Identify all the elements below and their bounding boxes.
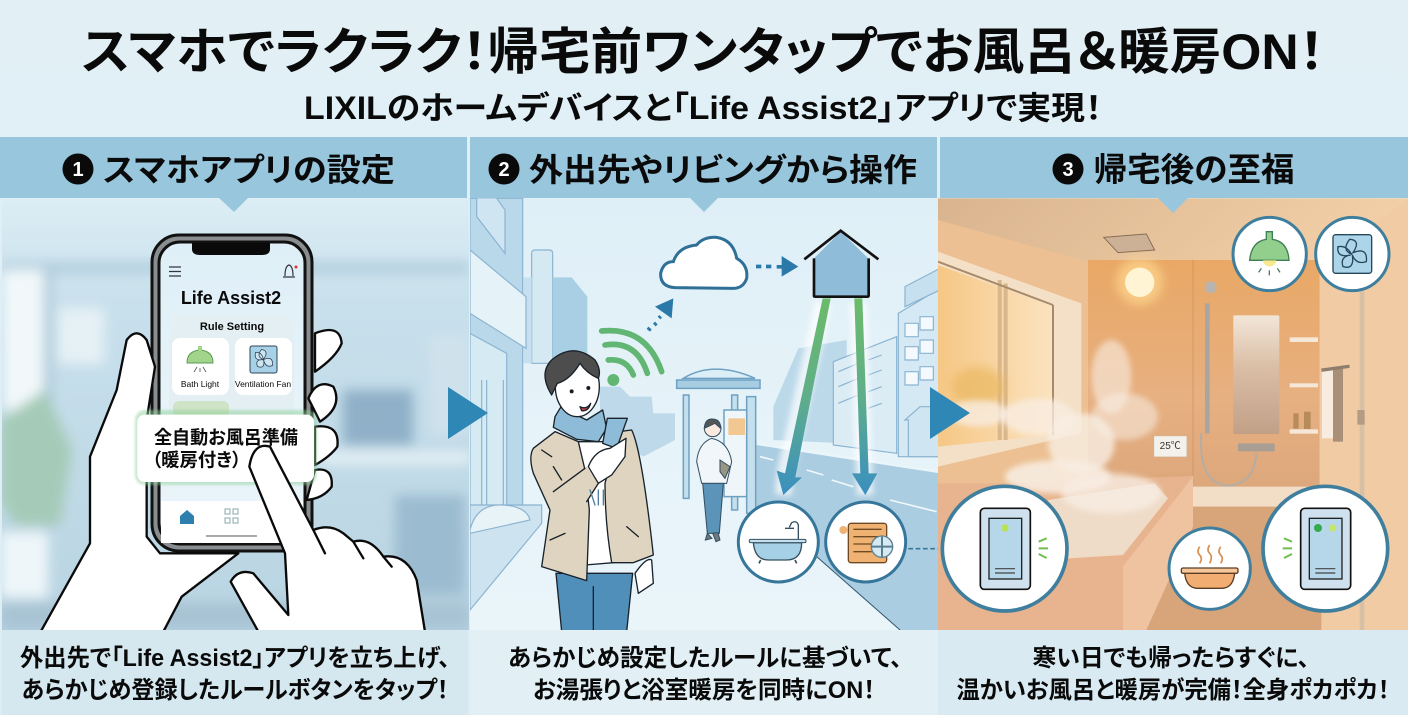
cloud [661, 237, 747, 288]
bench and floor [1191, 487, 1321, 507]
app menu and bell icons [169, 265, 298, 277]
ceiling vent [1104, 234, 1155, 253]
ceiling and walls [938, 198, 1408, 630]
head [555, 357, 599, 417]
road [755, 442, 940, 630]
fan circle icon [1316, 217, 1389, 291]
house [804, 231, 878, 297]
panel 2: operate from outside [470, 137, 940, 715]
bath light circle icon [1233, 217, 1306, 291]
panel 3 heading: 帰宅後の至福 [1094, 151, 1294, 188]
step 2 number badge [488, 154, 520, 184]
panel 2 illustration [470, 198, 940, 632]
smartphone [152, 235, 312, 551]
ceiling light [1116, 258, 1163, 305]
dashed link [908, 546, 940, 551]
panel 2 caption: あらかじめ設定したルールに基づいて、 [508, 645, 902, 672]
panel 3 caption [938, 630, 1408, 715]
wifi signal [602, 331, 662, 386]
left jacket side [531, 432, 589, 581]
panel 1: smartphone app setup [0, 137, 470, 715]
hand on phone [588, 438, 626, 483]
signal arrows to devices [777, 298, 877, 495]
arrow: step 1 to step 2 [448, 387, 488, 439]
lower hand [635, 559, 653, 593]
panel 2 heading: 外出先やリビングから操作 [529, 152, 917, 188]
right jacket side [605, 430, 653, 563]
title: スマホでラクラク！帰宅前ワンタップでお風呂＆暖房ON！ [82, 24, 1324, 80]
rule setting card [172, 322, 292, 414]
hands holding the phone [41, 330, 425, 632]
towel rack and towel [1321, 365, 1350, 442]
rule setting card: Rule Setting [200, 321, 264, 333]
pointing hand [231, 446, 425, 632]
shelves [1290, 337, 1318, 434]
right switch circle icon [1263, 486, 1388, 611]
panel 2 caption: お湯張りと浴室暖房を同時にON！ [533, 677, 875, 704]
fingers behind phone [315, 330, 342, 372]
dotted arrow to house [756, 256, 798, 277]
dotted arrow to cloud [647, 298, 673, 332]
app title: Life Assist2 [181, 288, 281, 308]
panel 3 caption: 寒い日でも帰ったらすぐに、 [1032, 645, 1310, 672]
rule button label [152, 427, 298, 471]
panel 2 caption [470, 630, 938, 715]
rule button card [137, 415, 314, 482]
step 1 number badge: 1 [72, 159, 84, 181]
left switch circle icon [942, 486, 1067, 611]
bath light button: Bath Light [181, 379, 220, 389]
subtitle: LIXILのホームデバイスと「Life Assist2」アプリで実現！ [304, 90, 1102, 126]
panel 1 caption [2, 630, 468, 715]
step 1 number badge [62, 154, 94, 184]
mirror [1233, 315, 1279, 434]
green glow under card [135, 410, 317, 485]
phone [603, 418, 627, 448]
panel 3 header band [940, 137, 1408, 198]
ventilation fan button: Ventilation Fan [235, 379, 291, 389]
step 2 number badge: 2 [498, 159, 510, 181]
step 3 number badge: 3 [1062, 159, 1074, 181]
bathtub with steam circle icon [1169, 528, 1250, 609]
control panel 25C [1154, 436, 1187, 457]
panel 3 caption: 温かいお風呂と暖房が完備！全身ポカポカ！ [956, 676, 1390, 704]
middle background blocks [600, 387, 675, 457]
shower rail and head [1201, 281, 1256, 486]
bottom nav [161, 501, 303, 543]
header pointer 2 [690, 198, 718, 212]
heater and fan circle icon [826, 502, 906, 582]
steam [948, 340, 1161, 513]
right buildings [773, 268, 940, 457]
control panel 25C: 25℃ [1160, 441, 1181, 452]
bus stop [677, 369, 760, 513]
arrow: step 2 to step 3 [930, 387, 970, 439]
window [938, 252, 1081, 467]
rule button label: （暖房付き） [152, 450, 241, 471]
shirt [578, 442, 613, 565]
main man with phone [531, 351, 653, 632]
panel 1 illustration [0, 198, 470, 632]
header pointer 3 [1158, 198, 1188, 213]
left buildings [470, 198, 587, 610]
bathtub [938, 476, 1195, 630]
panel 3: bliss after coming home [938, 137, 1408, 715]
bathtub circle icon [738, 502, 818, 582]
sleeve [550, 467, 598, 510]
left palm and thumb [41, 333, 238, 632]
step 3 number badge [1052, 154, 1084, 184]
panel 1 heading: スマホアプリの設定 [103, 152, 395, 188]
panel 1 caption: あらかじめ登録したルールボタンをタップ！ [22, 677, 448, 704]
person in background [697, 419, 732, 542]
blurred room background [0, 262, 470, 630]
panel 2 header band [470, 137, 937, 198]
rule button label: 全自動お風呂準備 [154, 427, 298, 448]
header pointer 1 [219, 198, 248, 212]
scarf [553, 407, 607, 442]
panel 1 header band [0, 137, 467, 198]
panel 3 bathroom scene [938, 198, 1408, 630]
faucet [1238, 443, 1275, 451]
jeans [556, 573, 633, 632]
panel 1 caption: 外出先で「Life Assist2」アプリを立ち上げ、 [20, 645, 450, 672]
signal arrow glow [783, 303, 865, 495]
